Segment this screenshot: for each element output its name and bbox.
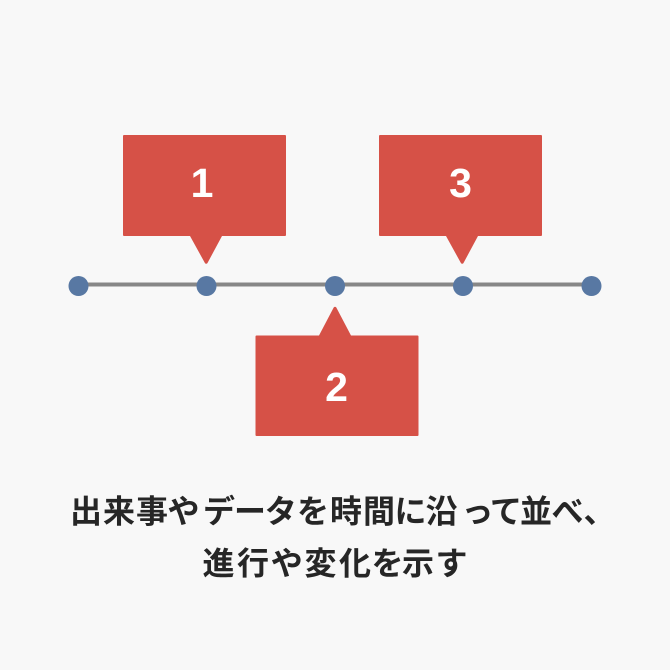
- callout 3: [379, 135, 542, 264]
- callout 3: 3: [449, 160, 472, 206]
- callout 2: 2: [325, 364, 348, 410]
- callout 1: 1: [191, 160, 213, 206]
- caption line 1: 出来事やデータを時間に沿って並べ、: [70, 494, 616, 530]
- callout 1: [123, 135, 286, 264]
- caption line 2: 進行や変化を示す: [202, 546, 468, 582]
- callout 2: [256, 307, 418, 436]
- timeline line: [78, 282, 592, 286]
- timeline dots: [68, 276, 602, 296]
